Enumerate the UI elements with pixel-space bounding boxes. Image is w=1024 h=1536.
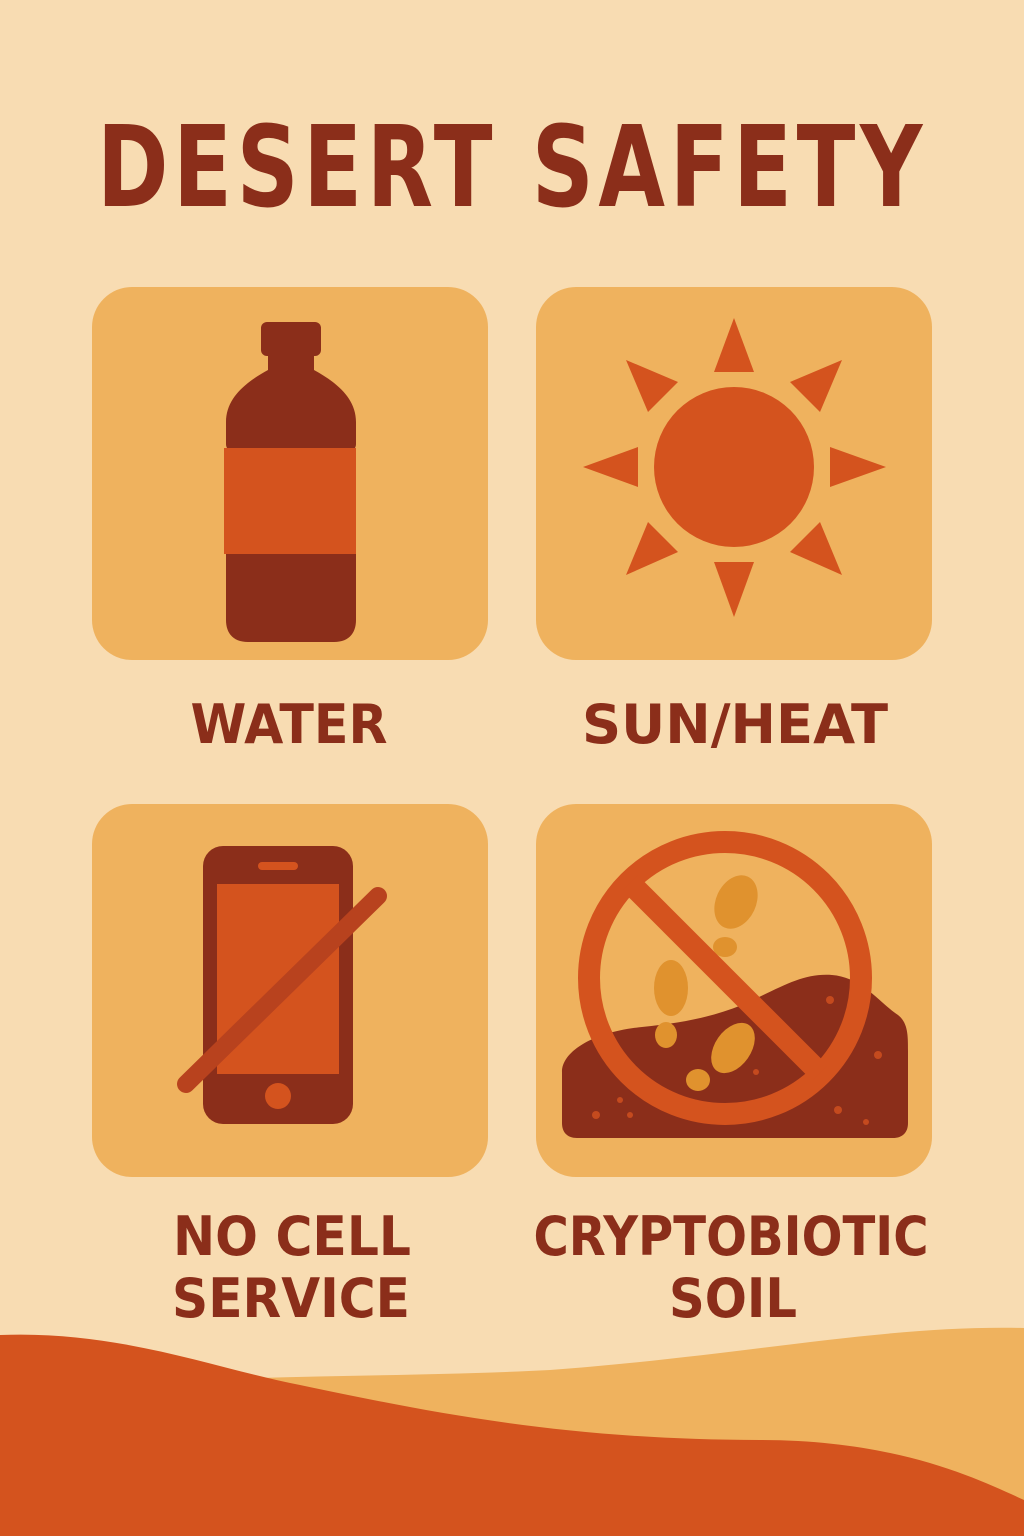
panel: cryptobiotic soil xyxy=(536,804,932,1177)
icon: footprints xyxy=(654,868,766,1091)
label: water: WATER xyxy=(190,693,388,756)
icon: sun xyxy=(583,318,886,617)
panel: sun/heat xyxy=(536,287,932,660)
label: sun/heat: SUN/HEAT xyxy=(582,693,888,756)
label: cryptobiotic soil: CRYPTOBIOTIC xyxy=(534,1205,928,1268)
label: no cell service: SERVICE xyxy=(172,1267,410,1330)
icon: phone crossed out xyxy=(186,846,378,1124)
panel: no cell service xyxy=(92,804,488,1177)
label: cryptobiotic soil: SOIL xyxy=(669,1267,797,1330)
icon: soil mound xyxy=(562,975,908,1138)
label: no cell service: NO CELL xyxy=(173,1205,411,1268)
panel: water xyxy=(92,287,488,660)
icon: water bottle xyxy=(224,322,356,642)
dunes xyxy=(0,1328,1024,1536)
icon: prohibition sign xyxy=(589,842,861,1114)
